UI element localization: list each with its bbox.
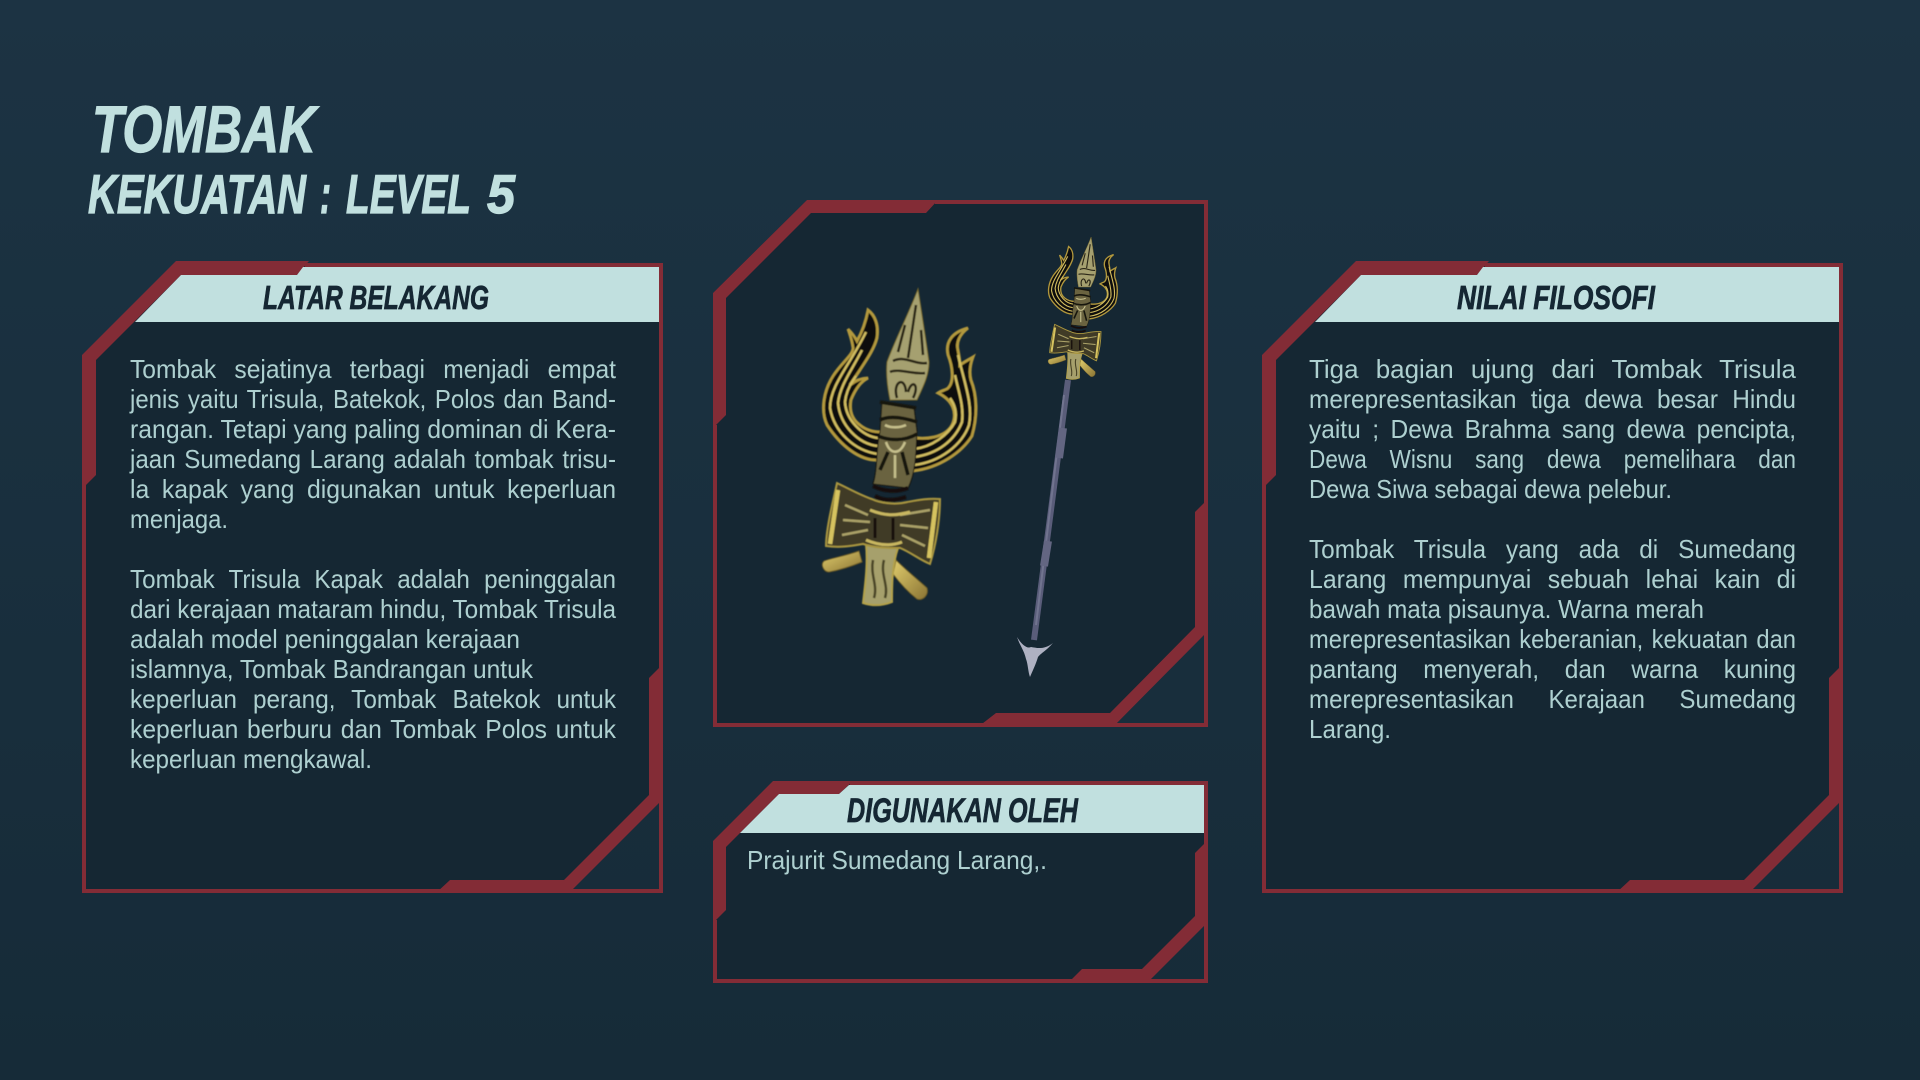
panel: digunakan oleh (713, 781, 1208, 983)
text block: latar belakang: Tombak Trisula Kapak adalah peninggalan (130, 564, 616, 594)
text block: latar belakang: rangan. Tetapi yang paling dominan di Kera- (130, 414, 616, 444)
text block: latar belakang: dari kerajaan mataram hindu, Tombak Trisula (130, 594, 616, 624)
text block: latar belakang: la kapak yang digunakan untuk keperluan (130, 474, 616, 504)
header band: nilai filosofi (1315, 267, 1839, 322)
text block: latar belakang: jaan Sumedang Larang adalah tombak trisu- (129, 444, 616, 474)
text block: nilai filosofi: Larang. (1309, 714, 1391, 744)
drum hilt (826, 483, 940, 564)
trident head, small (1048, 237, 1117, 379)
text block: nilai filosofi: Dewa Wisnu sang dewa pemelihara dan (1309, 444, 1796, 474)
text block: latar belakang: adalah model peninggalan kerajaan (130, 624, 520, 654)
panel: latar belakang (82, 261, 663, 893)
panel: nilai filosofi (1262, 261, 1843, 893)
text block: latar belakang: menjaga. (130, 504, 228, 534)
text block: nilai filosofi: Larang mempunyai sebuah lehai kain di (1309, 564, 1796, 594)
header band: latar belakang (135, 267, 659, 322)
header band: digunakan oleh: DIGUNAKAN OLEH (847, 792, 1079, 830)
header band: nilai filosofi: NILAI FILOSOFI (1457, 279, 1656, 316)
text block: nilai filosofi: Tiga bagian ujung dari Tombak Trisula (1309, 354, 1797, 384)
text block: latar belakang: keperluan mengkawal. (130, 744, 372, 774)
text block: nilai filosofi: Dewa Siwa sebagai dewa pelebur. (1309, 474, 1672, 504)
handle (863, 544, 898, 605)
icon: trident head, large (822, 289, 976, 605)
subtitle: power level: LEVEL (346, 163, 471, 225)
text block: nilai filosofi (1309, 354, 1797, 744)
text block: nilai filosofi: merepresentasikan Kerajaan Sumedang (1309, 684, 1796, 714)
icon: trident with long shaft (1017, 237, 1117, 677)
title: TOMBAK (92, 92, 319, 166)
text block: nilai filosofi: merepresentasikan keberanian, kekuatan dan (1309, 624, 1796, 654)
text block: latar belakang: keperluan berburu dan Tombak Polos untuk (130, 714, 617, 744)
header band: latar belakang: LATAR BELAKANG (263, 279, 489, 316)
center blade (887, 289, 929, 400)
text block: nilai filosofi: merepresentasikan tiga dewa besar Hindu (1309, 384, 1796, 414)
shaft butt (1017, 637, 1053, 677)
left prong (823, 310, 882, 460)
subtitle: power level: 5 (487, 163, 516, 225)
text block: nilai filosofi: pantang menyerah, dan warna kuning (1309, 654, 1796, 684)
header band: digunakan oleh (740, 785, 1204, 833)
text block: nilai filosofi: yaitu ; Dewa Brahma sang dewa pencipta, (1309, 414, 1796, 444)
right prong (910, 328, 976, 471)
text block: latar belakang: keperluan perang, Tombak Batekok untuk (130, 684, 617, 714)
text block: latar belakang: jenis yaitu Trisula, Batekok, Polos dan Band- (129, 384, 616, 414)
text block: digunakan oleh: Prajurit Sumedang Larang,. (747, 845, 1047, 875)
left tassel (822, 551, 862, 572)
panel: weapon images (713, 200, 1208, 727)
text block: latar belakang: islamnya, Tombak Bandrangan untuk (130, 654, 534, 684)
text block: latar belakang: Tombak sejatinya terbagi menjadi empat (130, 354, 617, 384)
right tassel (893, 560, 927, 599)
shaft (1034, 380, 1068, 640)
center body (873, 402, 917, 488)
subtitle: power level: KEKUATAN (88, 163, 307, 225)
text block: latar belakang (129, 354, 617, 774)
text block: nilai filosofi: bawah mata pisaunya. Warna merah (1309, 594, 1704, 624)
subtitle: power level: : (320, 163, 331, 225)
text block: nilai filosofi: Tombak Trisula yang ada di Sumedang (1309, 534, 1796, 564)
